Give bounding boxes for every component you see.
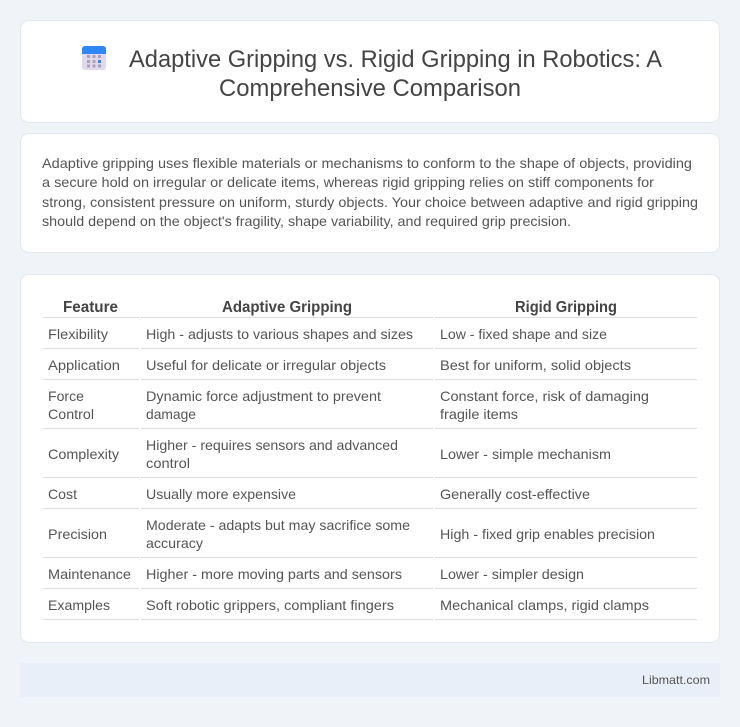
table row: Cost: Usually more expensive <box>146 486 296 502</box>
table row: Precision <box>43 517 697 558</box>
table row: Precision: High - fixed grip enables precision <box>440 526 655 542</box>
icon: calendar <box>82 46 106 70</box>
table row: Application: Application <box>48 357 120 373</box>
panel: title card <box>20 20 720 122</box>
table header: Feature <box>63 299 118 316</box>
table row: Cost: Generally cost-effective <box>440 486 590 502</box>
table row: Cost <box>43 486 697 509</box>
table row: Force Control: damage <box>146 406 196 422</box>
table row: Precision: Moderate - adapts but may sacrifice some <box>146 517 410 533</box>
table row: Examples: Soft robotic grippers, compliant fingers <box>146 597 394 613</box>
heading: title: Comprehensive Comparison <box>219 75 521 102</box>
text block: summary paragraph <box>42 155 698 229</box>
table row: Examples: Mechanical clamps, rigid clamps <box>440 597 649 613</box>
table row: Application: Useful for delicate or irregular objects <box>146 357 386 373</box>
table row: Precision: Precision <box>48 526 107 542</box>
table row: Force Control: Force <box>48 388 84 404</box>
table row: Complexity: Higher - requires sensors and advanced <box>146 437 398 453</box>
table row: Flexibility: Low - fixed shape and size <box>440 326 607 342</box>
table row: Flexibility: High - adjusts to various shapes and sizes <box>146 326 413 342</box>
table row: Maintenance: Maintenance <box>48 566 131 582</box>
table row: Examples: Examples <box>48 597 110 613</box>
table header <box>43 299 697 318</box>
panel: summary card <box>20 134 720 252</box>
table row: Force Control <box>43 388 697 429</box>
table header: Rigid Gripping <box>515 299 617 316</box>
table row: Application: Best for uniform, solid objects <box>440 357 631 373</box>
table row: Complexity: control <box>146 455 190 471</box>
table row: Flexibility <box>43 326 697 349</box>
footer bar: Libmatt.com <box>642 673 710 687</box>
table row: Complexity: Lower - simple mechanism <box>440 446 611 462</box>
heading: title <box>129 46 662 102</box>
table row: Force Control: Control <box>48 406 94 422</box>
table row: Examples <box>43 597 697 620</box>
text block: summary paragraph: strong, consistent pressure on uniform, sturdy objects. Your choice between adaptive and rigid gripping <box>42 194 698 210</box>
table row: Flexibility: Flexibility <box>48 326 108 342</box>
table row: Maintenance: Lower - simpler design <box>440 566 584 582</box>
table row: Maintenance <box>43 566 697 589</box>
table row: Maintenance: Higher - more moving parts and sensors <box>146 566 402 582</box>
table row: Cost: Cost <box>48 486 77 502</box>
heading: title: Adaptive Gripping vs. Rigid Gripping in Robotics: A <box>129 46 662 73</box>
table row: Complexity: Complexity <box>48 446 119 462</box>
table header: Adaptive Gripping <box>222 299 352 316</box>
table row: Force Control: Constant force, risk of damaging <box>440 388 649 404</box>
table row: Precision: accuracy <box>146 535 203 551</box>
text block: summary paragraph: a secure hold on irregular or delicate items, whereas rigid gripping relies on stiff components for <box>42 174 654 190</box>
text block: summary paragraph: Adaptive gripping uses flexible materials or mechanisms to conform to the shape of objects, providing <box>42 155 692 171</box>
table row: Complexity <box>43 437 697 478</box>
text block: summary paragraph: should depend on the object's fragility, shape variability, and required grip precision. <box>42 213 571 229</box>
panel: comparison table card <box>20 274 720 642</box>
footer bar <box>20 663 720 697</box>
table row: Force Control: Dynamic force adjustment to prevent <box>146 388 381 404</box>
table row: Force Control: fragile items <box>440 406 518 422</box>
table row: Application <box>43 357 697 380</box>
